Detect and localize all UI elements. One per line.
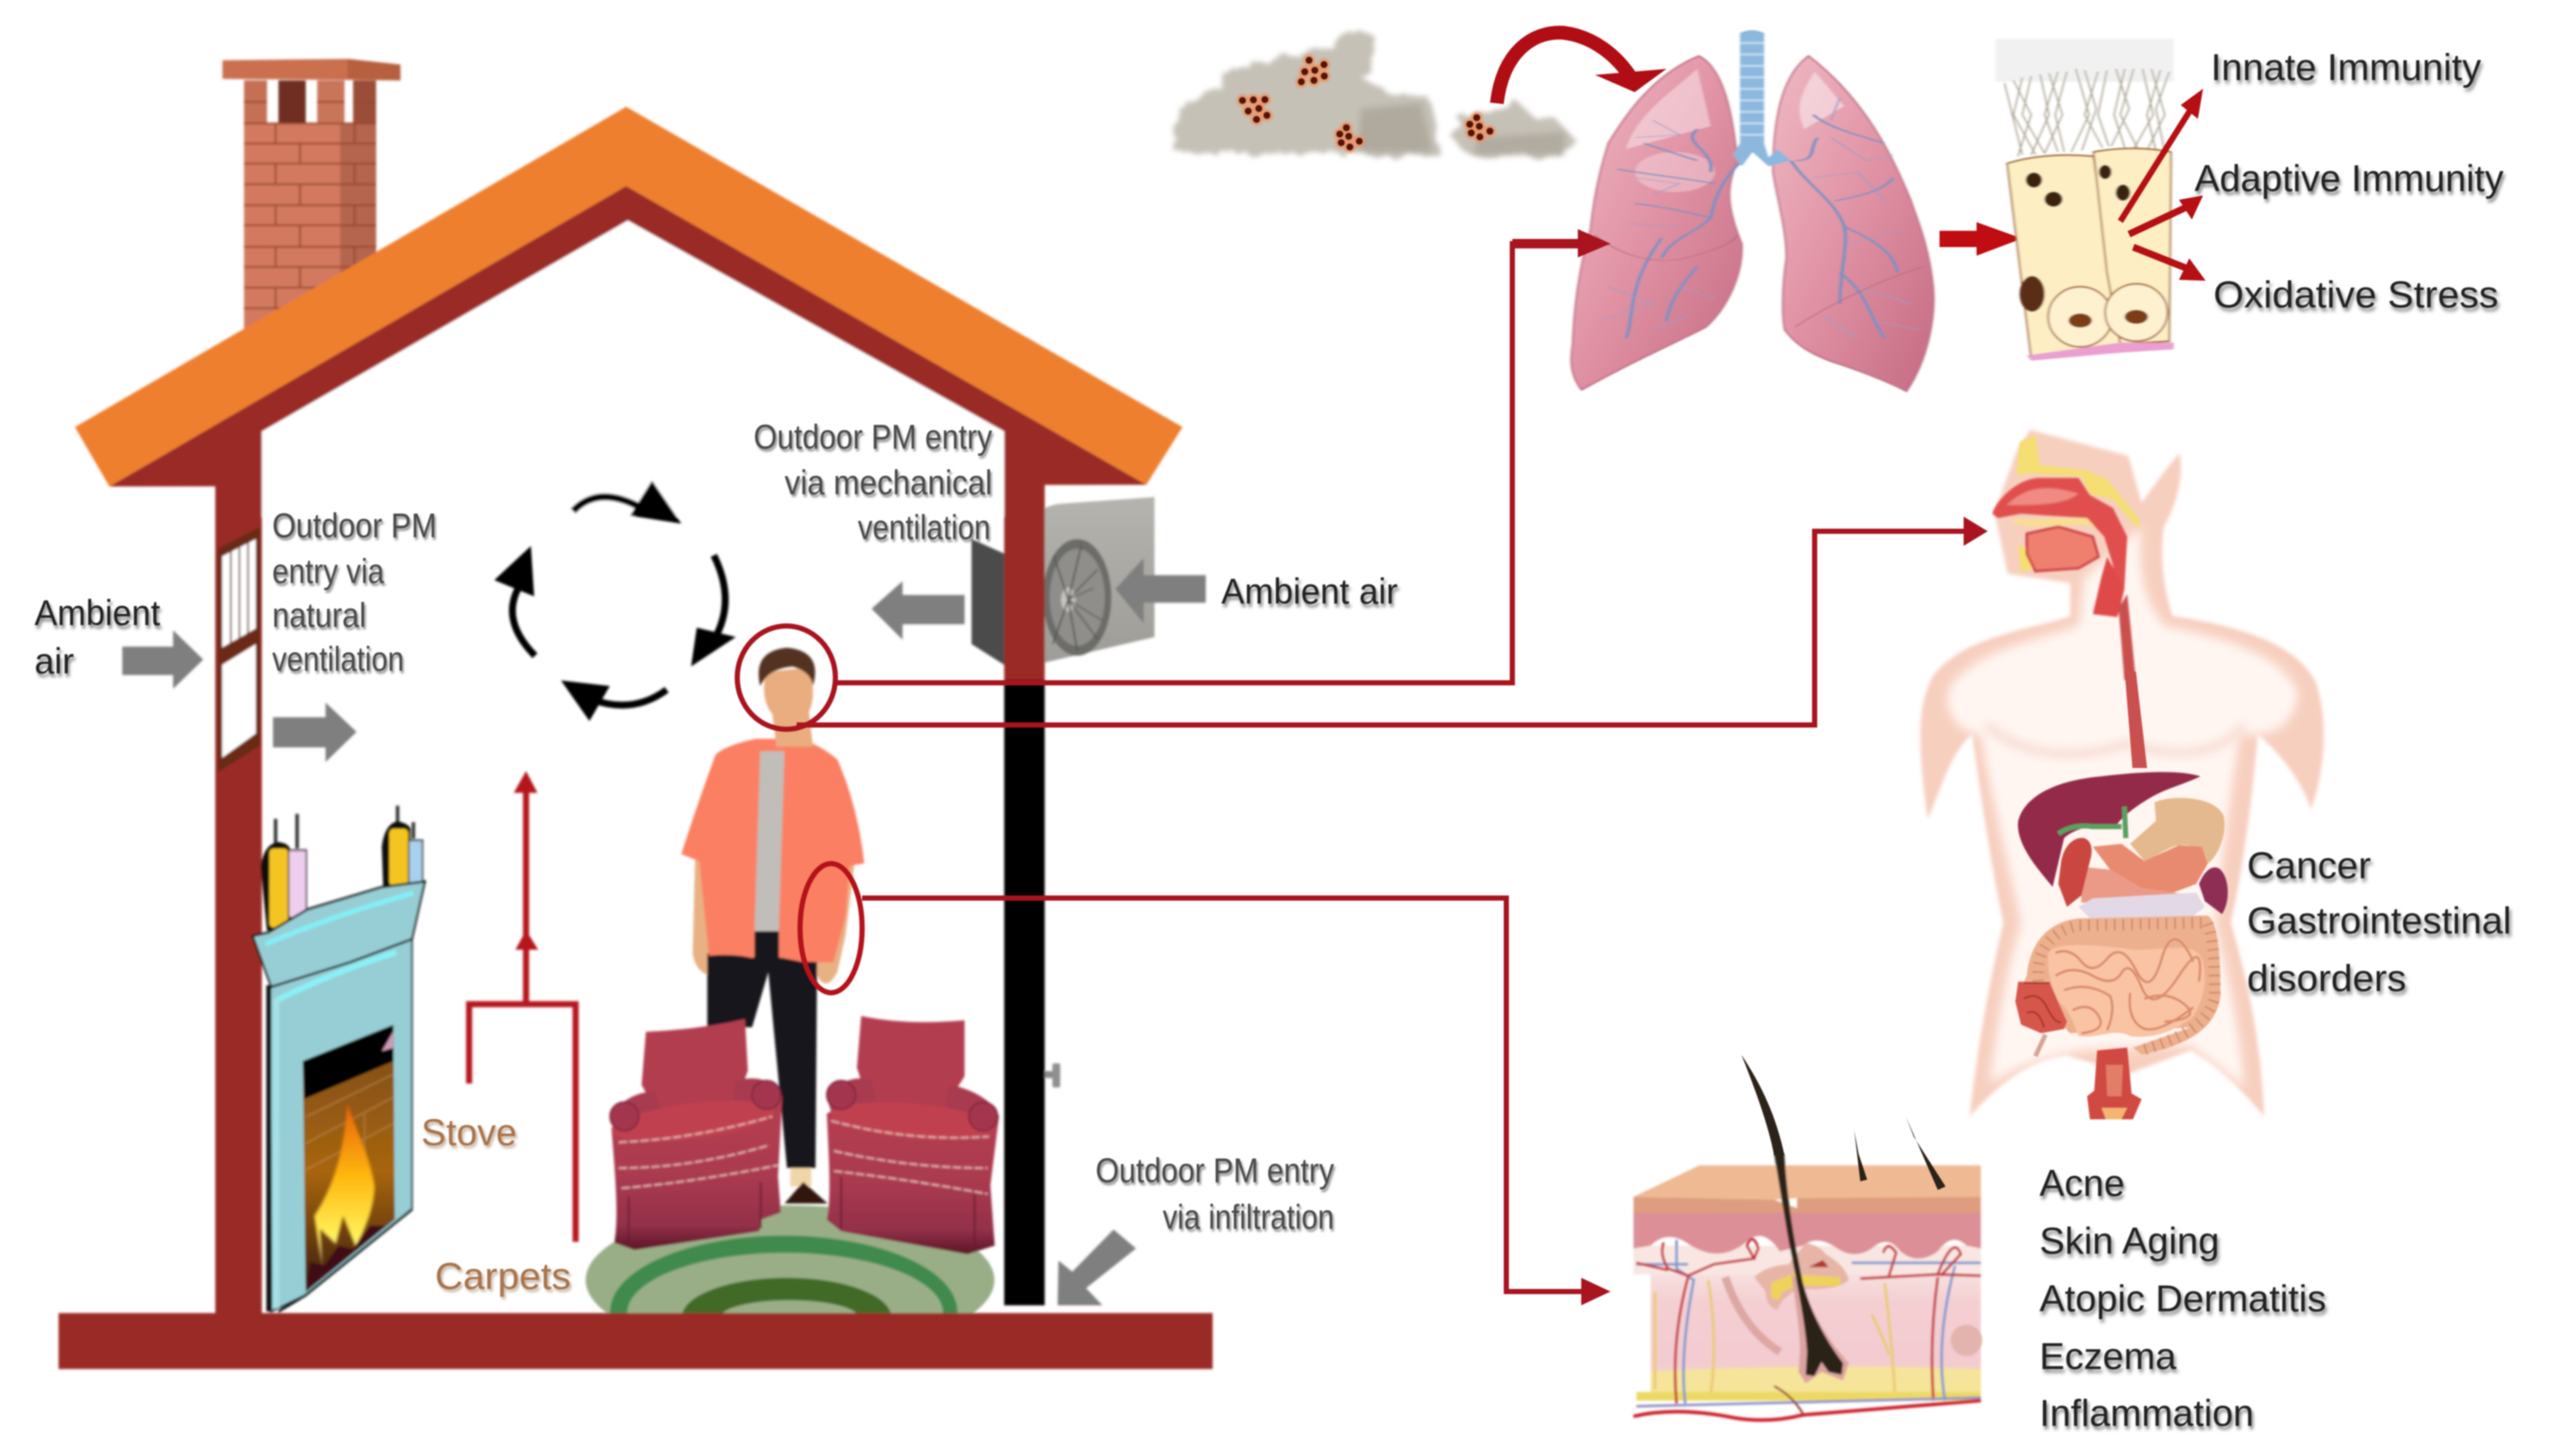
label: ambient air left: Ambient [34, 592, 160, 633]
label: skin conditions [2039, 1162, 2326, 1434]
smoke [1174, 32, 1576, 155]
arrow: head to lungs [834, 229, 1611, 683]
head and neck [764, 667, 813, 747]
cell bodies [2008, 155, 2120, 358]
arm highlight oval [800, 864, 862, 993]
label: mechanical ventilation: Outdoor PM entry [754, 418, 992, 456]
label: digestive disorders [2247, 845, 2511, 1000]
dermis base [1651, 1268, 1981, 1401]
fireplace [252, 806, 425, 1311]
hearth edge [278, 1210, 412, 1311]
nasal cavity [1992, 478, 2127, 594]
label: mechanical ventilation [754, 418, 992, 547]
stomach [2130, 798, 2225, 864]
particle clusters [1237, 54, 1496, 152]
label: skin conditions: Acne [2039, 1162, 2125, 1205]
flames [314, 1104, 375, 1266]
label: mechanical ventilation: via mechanical [785, 464, 992, 502]
cilia [2004, 69, 2169, 156]
duodenum [2058, 838, 2092, 907]
throat [2093, 557, 2125, 617]
red vessels [1636, 1239, 1981, 1403]
epidermis top [1634, 1165, 1981, 1199]
label: ambient air left [34, 592, 160, 681]
label: digestive disorders: Gastrointestinal [2247, 900, 2511, 942]
label: ambient air left: air [34, 641, 74, 681]
sweat gland [1951, 1324, 1983, 1356]
blue vessels [1636, 1240, 1981, 1403]
left armchair [610, 1019, 782, 1250]
small intestine [2048, 945, 2205, 1037]
nerves [1655, 1280, 1895, 1392]
upper dermis [1634, 1212, 1981, 1259]
label: oxidative stress: Oxidative Stress [2213, 274, 2498, 316]
right armchair [827, 1016, 999, 1255]
label: carpets: Carpets [435, 1255, 571, 1298]
particles [2020, 165, 2148, 327]
lungs [1571, 30, 1933, 392]
label: skin conditions: Atopic Dermatitis [2039, 1278, 2326, 1320]
esophagus [2119, 594, 2136, 680]
ankle [791, 1168, 811, 1186]
basement membrane [2027, 343, 2174, 361]
head highlight circle [737, 626, 835, 729]
air circulation arrows [494, 480, 736, 721]
gallbladder and ducts [2058, 807, 2126, 838]
pancreas [2082, 867, 2198, 902]
follicle [1791, 1274, 1849, 1384]
label: infiltration: Outdoor PM entry [1096, 1152, 1334, 1190]
grey airflow arrows [122, 558, 1206, 1305]
right lung [1773, 56, 1933, 392]
arrow: natural ventilation [273, 703, 357, 762]
chimney breast [270, 939, 412, 1311]
hair root [1774, 1154, 1843, 1376]
sinuses [2017, 435, 2139, 530]
label: digestive disorders: Cancer [2247, 845, 2371, 887]
esophagus lower [2125, 672, 2147, 768]
label: skin conditions: Skin Aging [2039, 1220, 2219, 1262]
candles [261, 806, 423, 931]
large intestine [2024, 915, 2220, 1055]
label: natural ventilation: Outdoor PM [272, 507, 437, 545]
sebaceous gland [1754, 1242, 1849, 1310]
tongue [2027, 527, 2099, 571]
arrow: AC output [872, 581, 965, 640]
liver [2018, 772, 2200, 887]
panel: digestive system torso [1921, 430, 2324, 1119]
basal cells [2048, 287, 2113, 347]
label: natural ventilation: entry via [272, 553, 385, 591]
arrow: ambient air into window [122, 630, 203, 689]
panel: house scene [59, 59, 1213, 1388]
logs [306, 1219, 394, 1292]
label: adaptive immunity: Adaptive Immunity [2194, 158, 2504, 200]
armchairs [610, 1016, 999, 1255]
label: natural ventilation [272, 507, 437, 678]
stratum band [1634, 1197, 1981, 1214]
torso silhouette [1921, 430, 2324, 1117]
label: stove: Stove [421, 1112, 517, 1154]
carpet [584, 1204, 996, 1316]
shirt [681, 739, 864, 963]
label: ambient air right: Ambient air [1221, 571, 1398, 611]
cecum [2015, 982, 2067, 1033]
panel: skin cross-section [1634, 1055, 1983, 1420]
lung highlights [1626, 69, 1844, 192]
deep vessels [1636, 1397, 1981, 1406]
lobe divisions [1595, 235, 1924, 327]
transverse mesentery [2078, 893, 2205, 921]
arrow: infiltration [1058, 1230, 1136, 1305]
bronchial tree [1617, 115, 1897, 338]
nasal cavity and throat [1992, 435, 2139, 680]
firebox [303, 1025, 394, 1292]
label: innate immunity: Innate Immunity [2211, 46, 2481, 89]
spleen [2199, 867, 2228, 914]
arrow: arm to skin [862, 898, 1611, 1305]
label: natural ventilation: ventilation [272, 641, 404, 678]
mantel [252, 882, 425, 987]
chimney [222, 59, 400, 330]
rectum [2087, 1048, 2142, 1119]
arrows: epithelium to responses [2120, 89, 2206, 281]
appendix [2035, 1035, 2045, 1056]
air conditioner unit [971, 497, 1154, 672]
label: mechanical ventilation: ventilation [858, 509, 990, 547]
window [218, 527, 260, 772]
trachea [1733, 30, 1791, 166]
arrector muscle [1725, 1277, 1780, 1352]
label: infiltration [1096, 1152, 1334, 1236]
person [681, 739, 864, 1204]
arrow: cloud to lungs [1497, 33, 1667, 103]
walls [215, 443, 1045, 1317]
label: digestive disorders: disorders [2247, 957, 2406, 1000]
label: skin conditions: Inflammation [2039, 1392, 2254, 1434]
stove and carpet emission arrows [469, 771, 575, 1242]
arms [692, 857, 711, 976]
fat layer [1636, 1366, 1981, 1401]
hair shafts [1741, 1055, 1946, 1190]
floor [59, 1313, 1213, 1369]
arrow: lungs to epithelium [1940, 222, 2022, 256]
label: natural ventilation: natural [272, 597, 366, 635]
label: skin conditions: Eczema [2039, 1335, 2177, 1378]
label: infiltration: via infiltration [1163, 1199, 1334, 1236]
door handle [1045, 1063, 1060, 1087]
digestive organs [2015, 772, 2228, 1119]
airway epithelial cells [1995, 39, 2174, 361]
arrow: ambient air into AC [1115, 558, 1206, 623]
roof [75, 107, 1182, 517]
shoe [785, 1182, 828, 1204]
arrow: head to digestive tract [797, 517, 1988, 725]
house labels [34, 418, 1398, 1298]
legs [707, 953, 817, 1168]
panel: pollution cloud [1174, 32, 1576, 155]
left lung [1571, 56, 1742, 390]
